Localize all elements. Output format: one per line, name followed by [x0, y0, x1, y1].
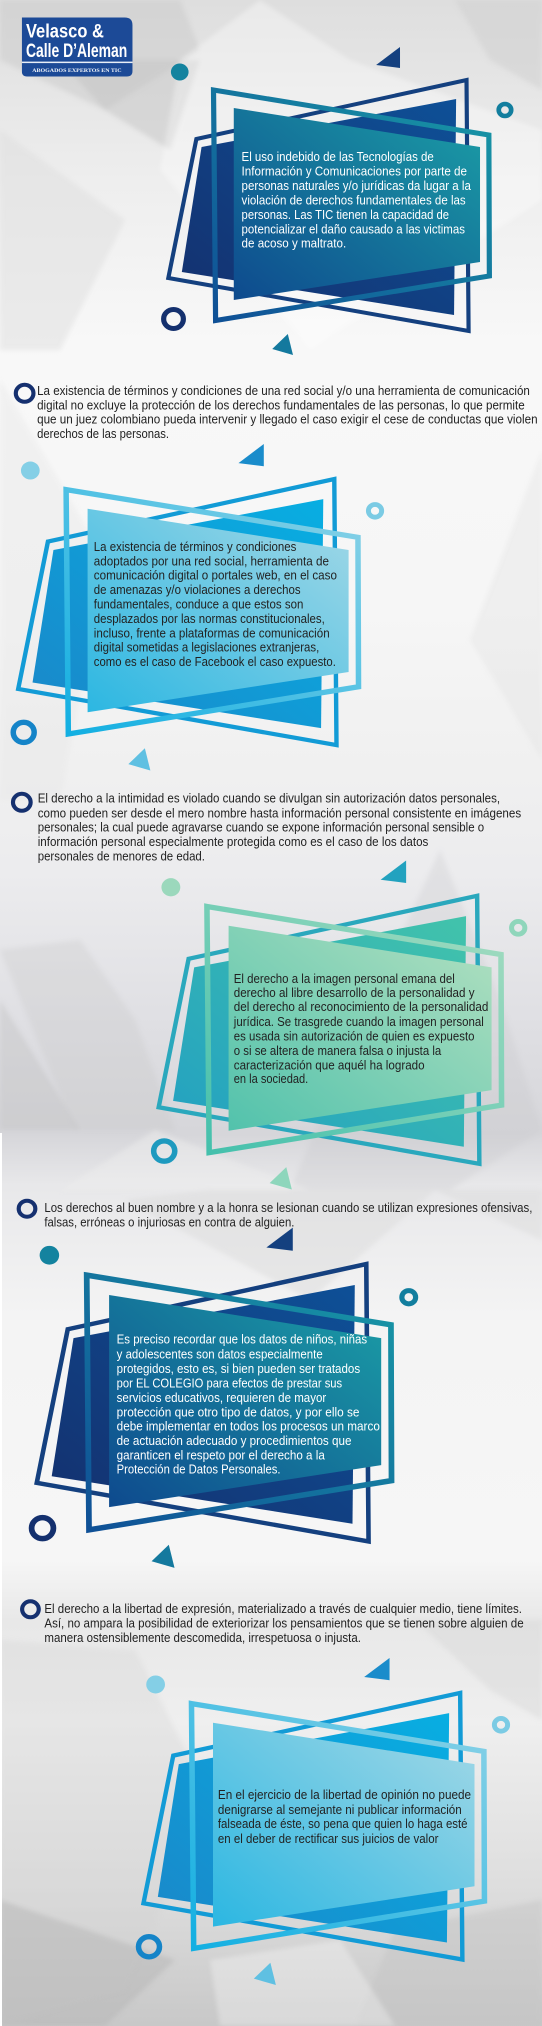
paragraph 2: personales de menores de edad.: [38, 849, 205, 863]
icon: bottom triangle: [270, 1167, 292, 1189]
text block: panel 2: adoptados por una red social, herramienta de: [94, 554, 329, 568]
text block: panel 1: personas. Las TIC tienen la capacidad de: [242, 207, 449, 222]
text block: panel 3: derecho al libre desarrollo de la personalidad y: [234, 985, 475, 1000]
icon: filled dot: [40, 1246, 59, 1265]
back frame: [18, 479, 336, 745]
icon: top triangle: [238, 444, 264, 466]
icon: bottom triangle: [272, 334, 293, 355]
text block: panel 2: [94, 539, 337, 669]
text block: panel 4: servicios educativos, requieren de mayor: [117, 1390, 327, 1405]
icon: large ring: [139, 1937, 159, 1957]
paragraph 2: personales; la cual puede agravarse cuando se expone información personal sensible o: [38, 820, 484, 834]
icon: large ring: [32, 1518, 53, 1539]
back solid shape: [173, 916, 466, 1147]
icon: large ring: [13, 722, 34, 742]
back solid shape: [52, 1285, 355, 1524]
panel 1: navy text card: [164, 47, 511, 355]
icon: filled dot: [161, 878, 180, 896]
icon: small ring: [499, 104, 511, 116]
back frame: [37, 1264, 369, 1541]
front frame: [87, 1275, 392, 1530]
text block: panel 2: La existencia de términos y condiciones: [94, 539, 297, 554]
icon: large ring: [154, 1141, 175, 1161]
front frame: [214, 90, 489, 320]
text block: panel 5: en el deber de rectificar sus juicios de valor: [218, 1831, 439, 1846]
text block: panel 4: por EL COLEGIO para efectos de prestar sus: [117, 1376, 343, 1390]
paragraph 3: [44, 1200, 532, 1230]
text block: panel 2: digital sometidas a legislaciones extranjeras,: [94, 640, 319, 654]
text block: panel 1: de acoso y maltrato.: [242, 236, 346, 250]
text block: panel 4: de actuación adecuado y procedimientos que: [117, 1433, 351, 1448]
icon: filled dot: [21, 462, 40, 480]
text block: panel 1: personas naturales y/o jurídicas da lugar a la: [242, 178, 472, 193]
front card: [88, 509, 349, 712]
text block: panel 4: garanticen el respeto por el derecho a la: [117, 1448, 325, 1462]
text block: panel 3: jurídica. Se trasgrede cuando la imagen personal: [233, 1014, 484, 1029]
paragraph 1: [37, 383, 538, 441]
icon: top triangle: [364, 1658, 390, 1680]
logo: Velasco & Calle D'Aleman: Velasco &: [26, 21, 104, 42]
paragraph 4: [44, 1601, 524, 1645]
icon: bottom triangle: [254, 1963, 276, 1985]
text block: panel 2: fundamentales, conduce a que estos son: [94, 597, 303, 611]
paragraph 2: [38, 791, 522, 863]
paragraph 1: derechos de las personas.: [37, 426, 169, 441]
text block: panel 4: [117, 1332, 380, 1477]
bullet ring 2: [13, 794, 31, 811]
text block: panel 3: es usada sin autorización de quien es expuesto: [234, 1029, 475, 1043]
front card: [229, 926, 492, 1131]
icon: small ring: [368, 504, 382, 517]
text block: panel 1: El uso indebido de las Tecnologías de: [242, 149, 434, 164]
front frame: [191, 1704, 484, 1948]
back solid shape: [182, 99, 456, 315]
text block: panel 1: violación de derechos fundamentales de las: [242, 193, 466, 207]
text block: panel 3: en la sociedad.: [234, 1071, 308, 1086]
text block: panel 4: Es preciso recordar que los datos de niños, niñas: [117, 1332, 367, 1347]
panel 2: light blue text card: [13, 444, 382, 771]
icon: filled dot: [146, 1675, 165, 1693]
text block: panel 2: incluso, frente a plataformas de comunicación: [94, 626, 330, 640]
front frame: [207, 906, 502, 1153]
icon: top triangle: [376, 47, 400, 68]
panel 3: green text card: [154, 861, 525, 1189]
text block: panel 4: protegidos, esto es, si bien pueden ser tratados: [117, 1361, 361, 1376]
logo: Velasco & Calle D'Aleman: ABOGADOS EXPERTOS EN TIC: [32, 68, 122, 74]
icon: top triangle: [381, 861, 406, 883]
icon: large ring: [164, 310, 183, 328]
text block: panel 4: y adolescentes son datos especialmente: [117, 1347, 323, 1361]
text block: panel 2: de amenazas y/o violaciones a derechos: [94, 582, 301, 597]
front card: [234, 108, 480, 300]
paragraph 3: falsas, erróneas o injuriosas en contra de alguien.: [44, 1215, 294, 1230]
icon: bottom triangle: [152, 1545, 175, 1568]
icon: small ring: [512, 921, 525, 934]
text block: panel 1: [242, 149, 472, 250]
back frame: [168, 80, 469, 331]
text block: panel 2: comunicación digital o portales web, en el caso: [94, 568, 337, 582]
panel 4: navy text card: [32, 1228, 416, 1568]
icon: filled dot: [171, 64, 189, 80]
text block: panel 5: falseada de éste, so pena que quien lo haga esté: [218, 1816, 468, 1831]
paragraph 2: información personal especialmente protegida como es el caso de los datos: [38, 834, 429, 849]
back frame: [143, 1693, 462, 1960]
logo: Velasco & Calle D'Aleman: Calle D’Aleman: [26, 40, 127, 62]
text block: panel 3: del derecho al reconocimiento de la personalidad: [234, 999, 488, 1014]
bullet ring 3: [19, 1201, 35, 1217]
text block: panel 3: caracterización que aquél ha logrado: [234, 1058, 425, 1072]
text block: panel 3: [233, 971, 488, 1086]
icon: top triangle: [266, 1228, 293, 1251]
front card: [213, 1723, 475, 1927]
back solid shape: [33, 499, 323, 728]
text block: panel 4: protección que otro tipo de datos, y por ello se: [117, 1405, 359, 1419]
panel 5: light blue text card: [139, 1658, 508, 1985]
text block: panel 3: o si se altera de manera falsa o injusta la: [234, 1043, 442, 1058]
text block: panel 2: desplazados por las normas constitucionales,: [94, 611, 325, 626]
text block: panel 4: Protección de Datos Personales.: [117, 1462, 281, 1477]
text block: panel 3: El derecho a la imagen personal emana del: [234, 971, 455, 986]
back frame: [159, 896, 479, 1164]
logo: Velasco & Calle D'Aleman: [22, 18, 132, 76]
text block: panel 1: potencializar el daño causado a las victimas: [242, 222, 465, 236]
icon: small ring: [402, 1291, 416, 1304]
text block: panel 4: debe implementar en todos los procesos un marco: [117, 1419, 380, 1433]
bullet ring 1: [16, 385, 33, 402]
front frame: [66, 490, 359, 734]
back solid shape: [158, 1713, 449, 1943]
text block: panel 5: denigrarse al semejante ni publicar información: [218, 1802, 462, 1817]
icon: small ring: [494, 1718, 508, 1731]
text block: panel 5: [218, 1787, 471, 1846]
paragraph 4: manera ostensiblemente descomedida, irrespetuosa o injusta.: [44, 1630, 361, 1645]
text block: panel 1: Información y Comunicaciones por parte de: [242, 164, 467, 178]
bullet ring 4: [22, 1601, 39, 1617]
icon: bottom triangle: [128, 748, 150, 771]
front card: [109, 1295, 381, 1507]
text block: panel 5: En el ejercicio de la libertad de opinión no puede: [218, 1787, 471, 1802]
text block: panel 2: como es el caso de Facebook el caso expuesto.: [94, 654, 336, 669]
